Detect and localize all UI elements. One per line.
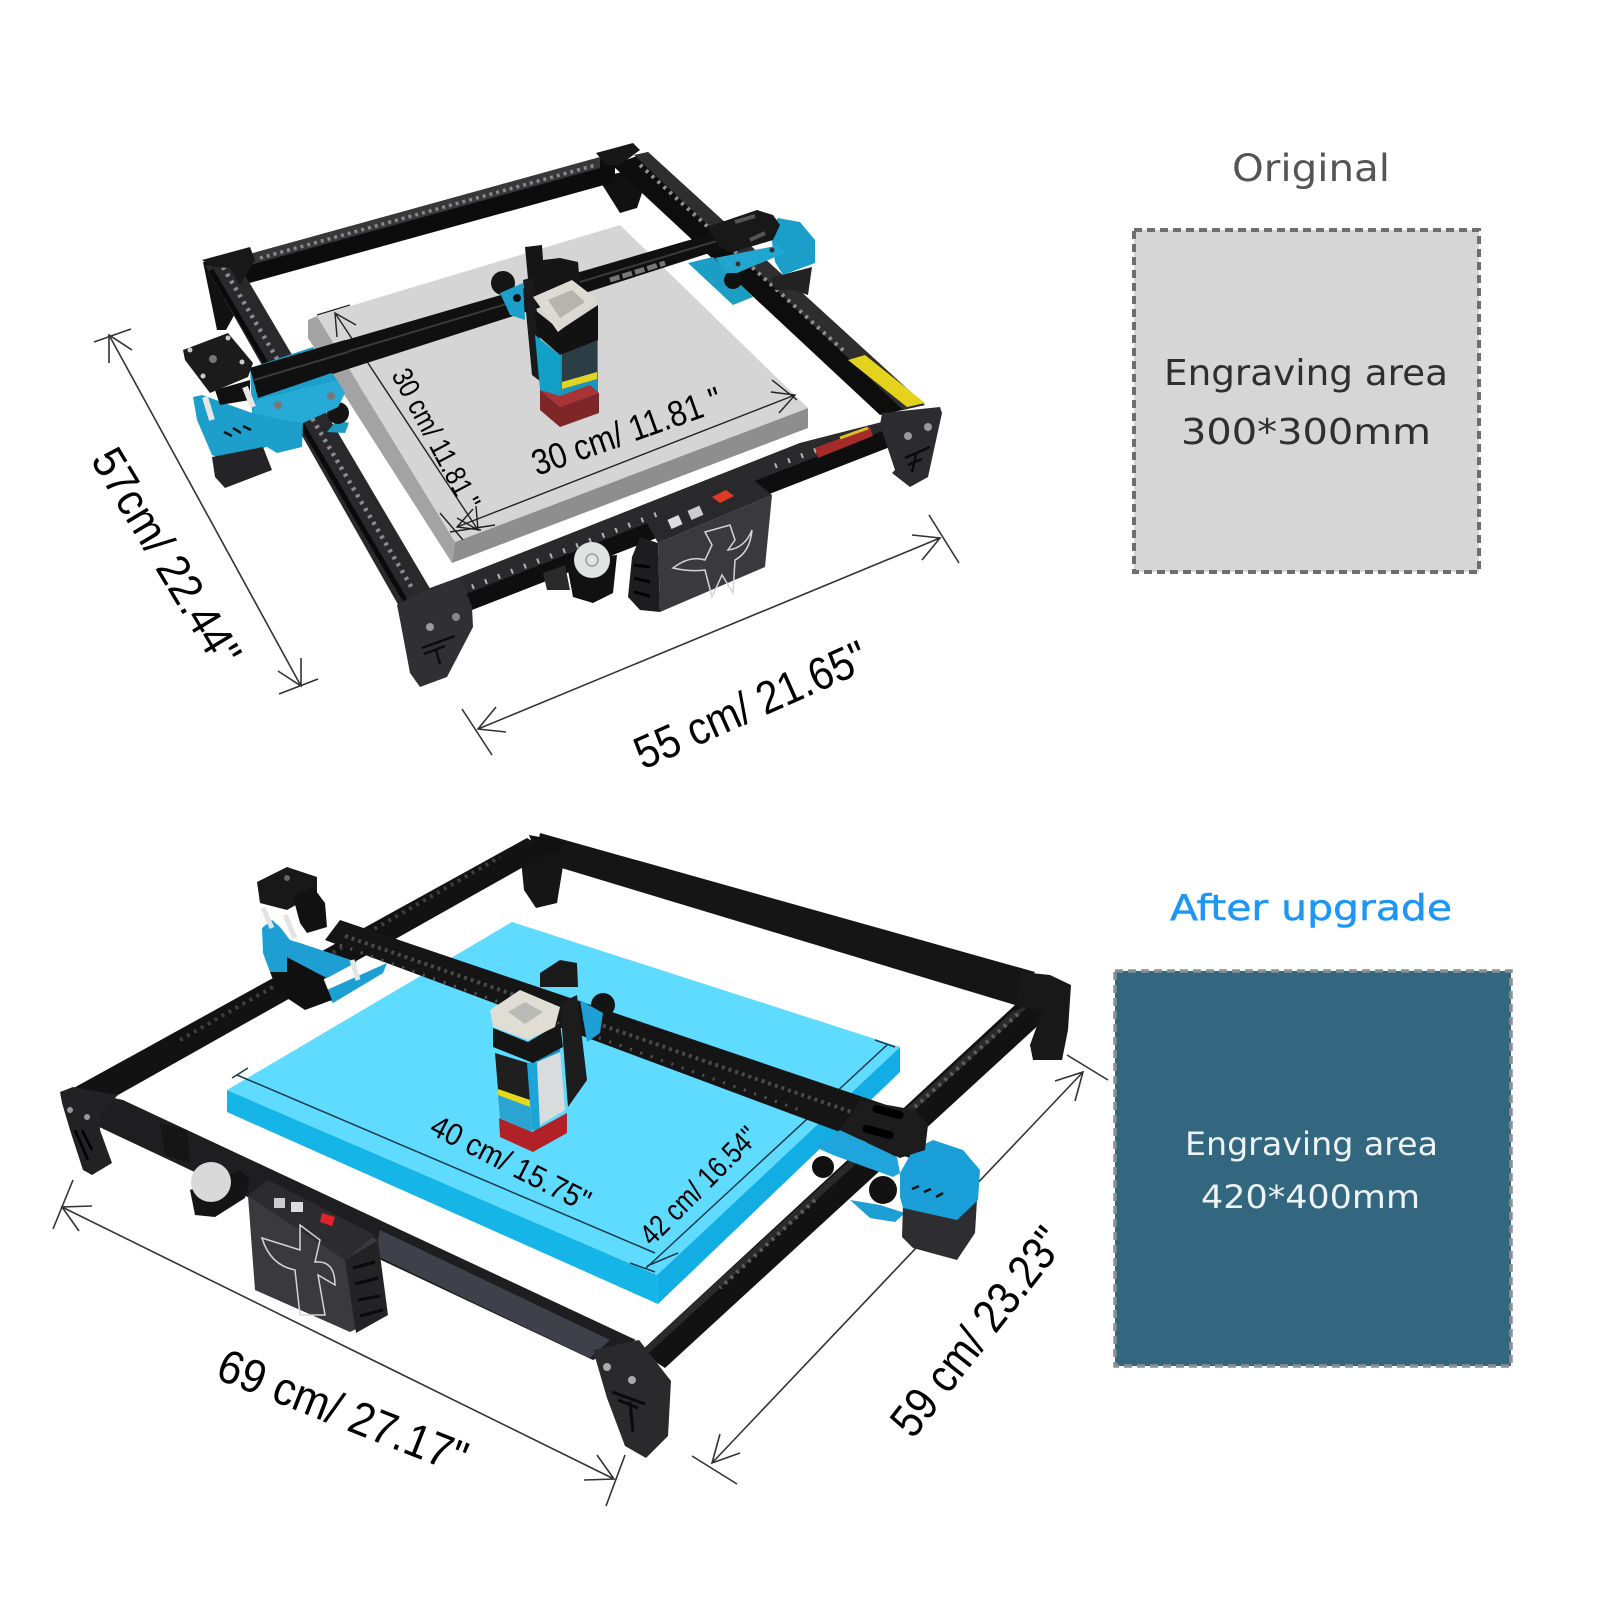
original right blue gantry end	[688, 218, 815, 305]
panel: upgraded engraving area	[1115, 971, 1511, 1366]
original right gantry block	[707, 210, 785, 273]
upgraded focus knob	[190, 1162, 250, 1217]
panel: original engraving area	[1134, 230, 1479, 572]
label: original depth 57 cm: 57cm/ 22.44"	[81, 438, 252, 675]
upgraded control box	[248, 1180, 388, 1333]
upgraded left rail	[70, 835, 566, 1095]
panel: upgraded engraving area: 420*400mm	[1201, 1178, 1420, 1216]
upgraded right rail	[640, 972, 1071, 1368]
upgraded machine rear legs	[521, 860, 564, 908]
heading: Original: Original	[1232, 147, 1390, 190]
original left rail	[202, 247, 432, 608]
original front left leg with logo	[397, 577, 473, 687]
upgraded back rail	[535, 833, 1035, 1005]
label: upgraded depth 59 cm: 59 cm/ 23.23"	[879, 1217, 1075, 1446]
dimension: 57 cm depth arrow	[94, 329, 318, 694]
panel: original engraving area: Engraving area	[1164, 353, 1448, 394]
upgraded left gantry end	[257, 867, 387, 1010]
panel: original engraving area: 300*300mm	[1181, 412, 1431, 453]
dimension: 55 cm width arrow	[462, 515, 959, 755]
original right rail	[596, 143, 925, 415]
label: upgraded area width: 40 cm/ 15.75"	[425, 1108, 597, 1219]
original back rail	[235, 153, 615, 287]
heading: After upgrade: After upgrade	[1170, 888, 1452, 929]
original machine rear legs	[203, 170, 642, 330]
upgraded right gantry end	[812, 1100, 980, 1260]
original front rail	[460, 420, 890, 610]
inner depth dimension 42 cm	[630, 1040, 895, 1272]
original focus knob	[543, 542, 617, 603]
upgraded engraving plate	[227, 922, 900, 1304]
upgraded front rail	[95, 1095, 636, 1360]
label: upgraded width 69 cm: 69 cm/ 27.17"	[210, 1338, 475, 1484]
original front right leg with logo	[880, 407, 942, 487]
upgraded front left leg	[60, 1087, 118, 1175]
dimension: 59 cm depth arrow	[692, 1055, 1108, 1484]
inner width dimension 30 cm	[440, 380, 797, 540]
label: original area width: 30 cm/ 11.81 "	[526, 378, 727, 484]
upgraded gantry bar	[325, 920, 925, 1160]
dimension: 69 cm width arrow	[53, 1180, 625, 1506]
original control box	[628, 475, 772, 612]
label: original width 55 cm: 55 cm/ 21.65"	[626, 630, 875, 779]
original gantry bar	[250, 232, 725, 398]
original engraving plate	[308, 225, 808, 563]
panel: upgraded engraving area: Engraving area	[1185, 1125, 1438, 1163]
label: upgraded area depth: 42 cm/ 16.54"	[634, 1120, 765, 1252]
label: original area depth: 30 cm/ 11.81 "	[385, 363, 486, 515]
upgraded laser head	[490, 960, 615, 1152]
inner width dimension 40 cm	[232, 1068, 678, 1266]
original laser head	[491, 245, 599, 427]
original left motor and blue mount	[183, 333, 352, 488]
upgraded front right leg	[593, 1340, 671, 1458]
inner depth dimension 30 cm	[317, 305, 495, 532]
